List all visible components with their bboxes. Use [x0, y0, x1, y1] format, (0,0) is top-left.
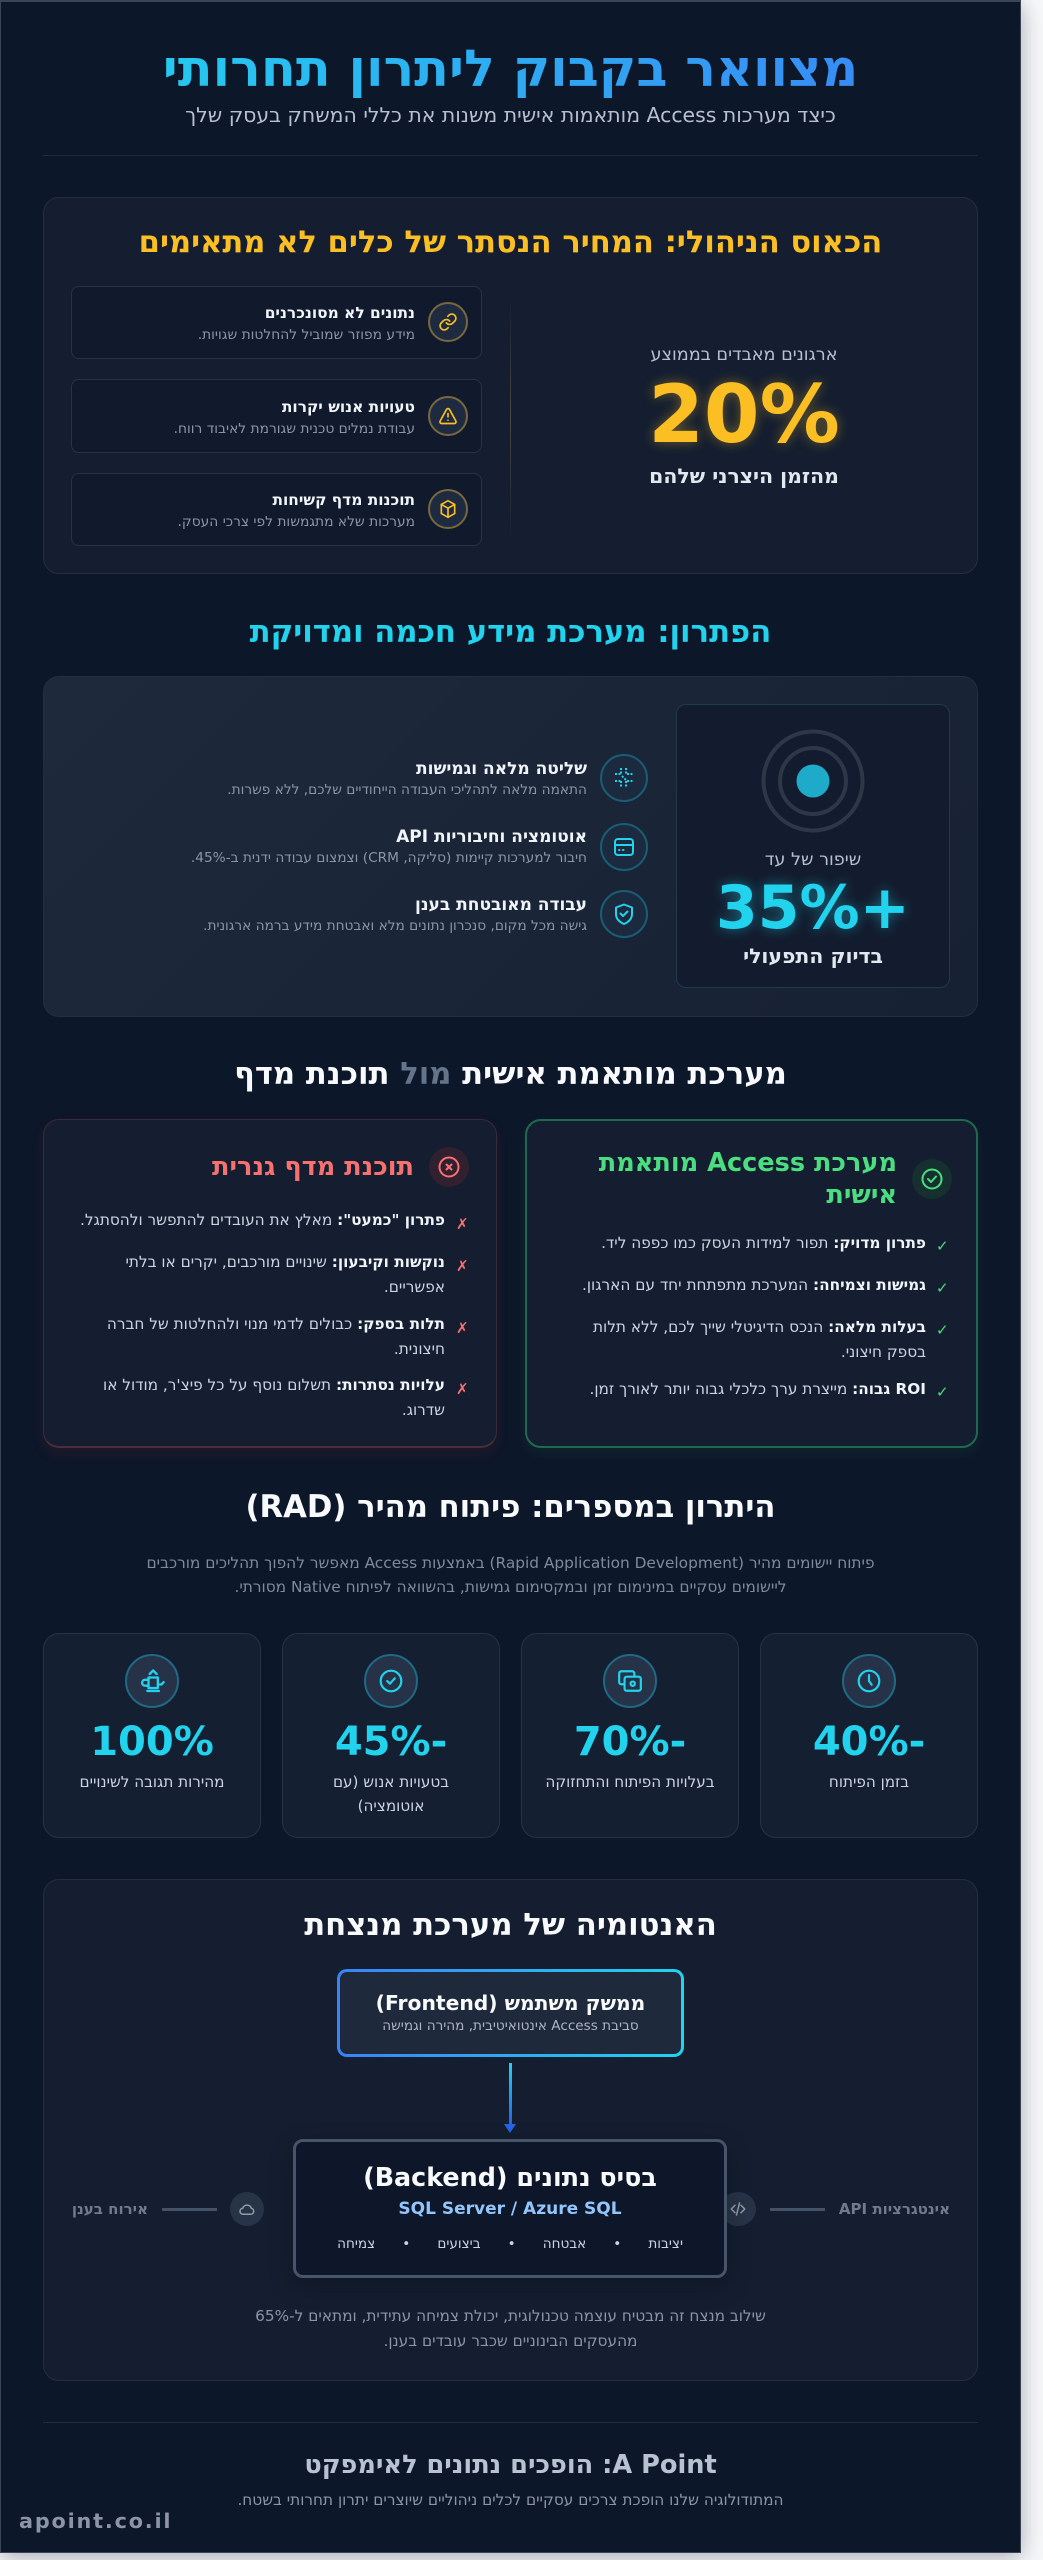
icon: oil can: [125, 1654, 179, 1708]
card 3 text: מערכות שלא מתגמשות לפי צרכי העסק.: [178, 514, 415, 530]
side: cloud hosting: [72, 2192, 264, 2226]
backend title: בסיס נתונים (Backend): [363, 2162, 657, 2192]
x 2: ✗: [456, 1257, 469, 1275]
stat caption: מהזמן היצרני שלהם: [649, 464, 839, 488]
stat card: 45: [282, 1633, 500, 1838]
label 45: בטעויות אנוש (עם: [333, 1773, 449, 1791]
card 2 text: עבודת נמלים טכנית שגורמת לאיבוד רווח.: [174, 421, 415, 437]
generic item 4: [103, 1376, 445, 1418]
stat card: 40: [760, 1633, 978, 1838]
x 4: ✗: [456, 1380, 469, 1398]
custom item 3: בעלות מלאה: הנכס הדיגיטלי שייך לכם, ללא תלות: [593, 1318, 926, 1336]
panel: custom access: [525, 1119, 978, 1448]
RAD paragraph: [146, 1554, 875, 1596]
label 45: [333, 1773, 449, 1815]
footer title: A Point: הופכים נתונים לאימפקט: [304, 2450, 717, 2480]
stat lead: ארגונים מאבדים בממוצע: [650, 345, 838, 365]
backend list: אבטחה: [543, 2236, 586, 2252]
card 1 text: מידע מפוזר שמוביל להחלטות שגויות.: [198, 327, 415, 343]
chaos card 2: [71, 379, 482, 453]
label 100: מהירות תגובה לשינויים: [80, 1773, 224, 1791]
RAD paragraph: ליישומים עסקיים במינימום זמן ובמקסימום גמישות, בהשוואה לפיתוח Native מסורתי.: [234, 1578, 787, 1596]
card 1 title: נתונים לא מסונכרנים: [265, 304, 415, 322]
label 40: בזמן הפיתוח: [829, 1773, 909, 1791]
custom item 3: [593, 1318, 926, 1360]
x 1: ✗: [456, 1215, 469, 1233]
backend box: [293, 2139, 727, 2278]
icon: link: [428, 302, 468, 342]
subtitle: כיצד מערכות Access מותאמות אישית משנות את כללי המשחק בעסק שלך: [185, 103, 836, 127]
stat card: 100: [43, 1633, 261, 1838]
check 4: ✓: [936, 1383, 949, 1401]
value 100: 100%: [90, 1719, 214, 1765]
backend list: •: [613, 2236, 621, 2252]
value 70: 70%-: [574, 1719, 686, 1765]
feature 2 text: חיבור למערכות קיימות (סליקה, CRM) וצמצום עבודה ידנית ב-45%.: [191, 850, 587, 866]
feature 3 text: גישה מכל מקום, סנכרון נתונים מלא ואבטחת מידע ברמה ארגונית.: [203, 918, 587, 934]
stat number: 20%: [648, 368, 840, 461]
title: [43, 38, 978, 102]
feature 3 title: עבודה מאובטחת בענן: [415, 895, 587, 915]
check 1: ✓: [936, 1237, 949, 1255]
improvement number: 35%+: [716, 873, 910, 943]
custom heading: מערכת Access מותאמת אישית: [599, 1148, 897, 1210]
improvement lead: שיפור של עד: [765, 850, 861, 870]
generic item 4: עלויות נסתרות: תשלום נוסף על כל פיצ'ר, מודול או: [103, 1376, 445, 1394]
check 2: ✓: [936, 1279, 949, 1297]
generic item 4: שדרוג.: [402, 1400, 445, 1418]
feature 2 icon: [600, 823, 648, 871]
side: API integrations: [727, 2192, 950, 2226]
arrow: frontend to backend: [504, 2063, 516, 2133]
frontend text: סביבת Access אינטואיטיבית, מהירה וגמישה: [382, 2018, 639, 2034]
icon: check: [364, 1654, 418, 1708]
custom item 3: בספק חיצוני.: [841, 1342, 926, 1360]
backend list: •: [508, 2236, 516, 2252]
panel: generic software: [43, 1119, 497, 1448]
improvement caption: בדיוק התפעולי: [743, 944, 883, 968]
value 45: 45%-: [335, 1719, 447, 1765]
target icon: [762, 730, 864, 832]
footer text: המתודולוגיה שלנו הופכת צרכים עסקיים לכלים ניהוליים שיוצרים יתרון תחרותי בשטח.: [237, 2491, 784, 2509]
label 45: אוטומציה): [358, 1797, 424, 1815]
custom item 2: גמישות וצמיחה: המערכת מתפתחת יחד עם הארגון.: [582, 1276, 926, 1294]
frontend title: ממשק משתמש (Frontend): [376, 1991, 645, 2015]
backend list: יציבות: [648, 2236, 683, 2252]
feature 1 text: התאמה מלאה לתהליכי העבודה הייחודיים שלכם, ללא פשרות.: [227, 782, 587, 798]
backend list: [337, 2236, 683, 2252]
generic item 1: פתרון "כמעט": מאלץ את העובדים להתפשר ולהסתגל.: [80, 1211, 445, 1229]
API label: אינטגרציות API: [839, 2200, 950, 2218]
feature 2 title: אוטומציה וחיבוריות API: [396, 827, 587, 847]
watermark: apoint.co.il: [19, 2509, 172, 2533]
generic item 2: אפשריים.: [384, 1278, 445, 1296]
feature 1 icon: [600, 754, 648, 802]
label 70: בעלויות הפיתוח והתחזוקה: [545, 1773, 715, 1791]
generic item 3: תלות בספק: כבולים לדמי מנוי ולהחלטות של חברה: [107, 1315, 445, 1333]
stat: 20 percent: [648, 345, 844, 488]
icon: check circle: [912, 1159, 952, 1199]
x 3: ✗: [456, 1319, 469, 1337]
feature 1 title: שליטה מלאה וגמישות: [416, 759, 587, 779]
solution heading: הפתרון: מערכת מידע חכמה ומדויקת: [250, 615, 771, 650]
icon: clock: [842, 1654, 896, 1708]
icon: x circle: [429, 1147, 469, 1187]
RAD heading: היתרון במספרים: פיתוח מהיר (RAD): [246, 1490, 776, 1525]
card 2 title: טעויות אנוש יקרות: [282, 398, 415, 416]
custom item 4: ROI גבוה: מייצרת ערך כלכלי גבוה יותר לאורך זמן.: [589, 1380, 926, 1398]
backend list: ביצועים: [437, 2236, 481, 2252]
solution stat card: [676, 704, 950, 988]
chaos card 3: [71, 473, 482, 546]
generic item 2: נוקשות וקיבעון: שינויים מורכבים, יקרים או בלתי: [125, 1253, 445, 1271]
chaos heading: הכאוס הניהולי: המחיר הנסתר של כלים לא מתאימים: [139, 225, 882, 260]
value 40: 40%-: [813, 1719, 925, 1765]
generic item 3: [107, 1315, 445, 1358]
generic item 3: חיצונית.: [394, 1340, 445, 1358]
icon: box: [428, 489, 468, 529]
panel: chaos: [43, 197, 978, 574]
comparison heading: מערכת מותאמת אישית מול תוכנת מדף: [234, 1057, 787, 1092]
panel: solution: [43, 676, 978, 1017]
generic heading: תוכנת מדף גנרית: [212, 1152, 414, 1182]
backend list: צמיחה: [337, 2236, 375, 2252]
backend tech: SQL Server / Azure SQL: [398, 2199, 622, 2219]
anatomy description: שילוב מנצח זה מבטיח עוצמה טכנולוגית, יכולת צמיחה עתידית, ומתאים ל-65%: [255, 2307, 766, 2325]
backend list: •: [402, 2236, 410, 2252]
check 3: ✓: [936, 1321, 949, 1339]
anatomy description: [255, 2307, 766, 2350]
card 3 title: תוכנות מדף קשיחות: [273, 491, 415, 509]
generic item 2: [125, 1253, 445, 1296]
RAD paragraph: פיתוח יישומים מהיר (Rapid Application Development) באמצעות Access מאפשר להפוך תהליכים מורכבים: [146, 1554, 875, 1572]
custom item 1: פתרון מדויק: תפור למידות העסק כמו כפפה ליד.: [601, 1234, 926, 1252]
stat card: 70: [521, 1633, 739, 1838]
feature 3 icon: [600, 890, 648, 938]
panel: anatomy: [43, 1879, 978, 2381]
hosting label: אירוח בענן: [72, 2200, 148, 2218]
icon: money: [603, 1654, 657, 1708]
anatomy heading: האנטומיה של מערכת מנצחת: [304, 1908, 717, 1943]
icon: cloud: [230, 2192, 264, 2226]
frontend box: [337, 1969, 684, 2057]
icon: code: [720, 2192, 756, 2226]
chaos card 1: [71, 286, 482, 359]
icon: warning: [428, 396, 468, 436]
anatomy description: מהעסקים הבינוניים שכבר עובדים בענן.: [384, 2332, 637, 2350]
